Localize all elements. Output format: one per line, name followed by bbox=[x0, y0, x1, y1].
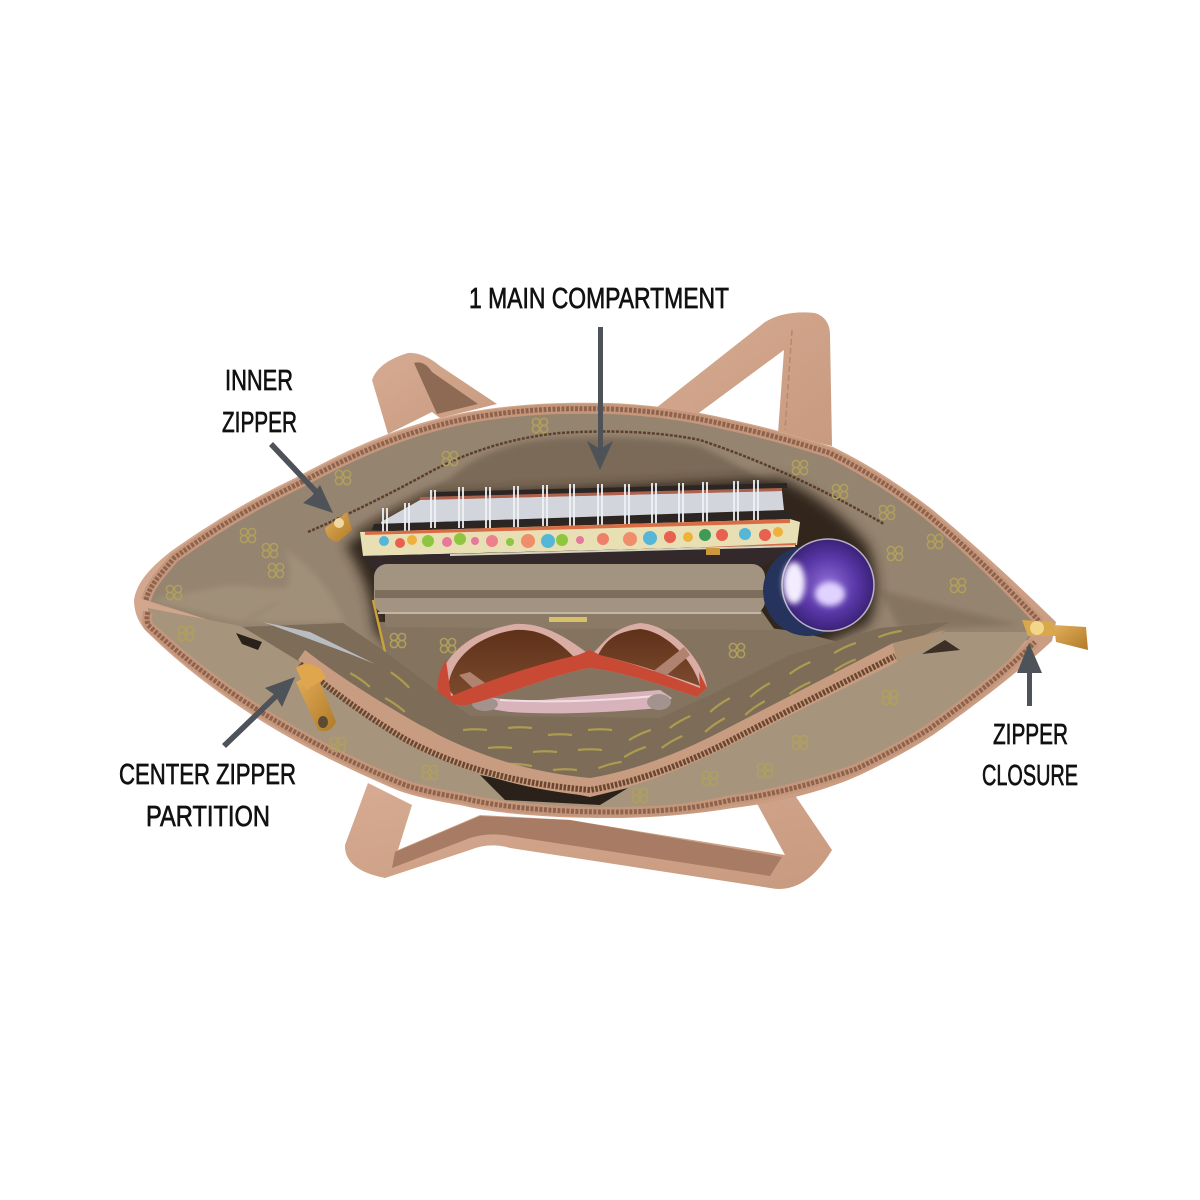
label: zipper closure bbox=[982, 719, 1078, 792]
lining: upper back wall bbox=[146, 409, 1040, 670]
label: zipper closure: ZIPPER bbox=[993, 719, 1068, 751]
label: 1 main compartment: 1 MAIN COMPARTMENT bbox=[469, 283, 729, 315]
main compartment: dark cavity bbox=[345, 437, 876, 660]
rim zipper tape bbox=[146, 409, 1040, 812]
lining gold logo marks bbox=[166, 418, 966, 803]
compartment floor bbox=[378, 622, 850, 745]
label: inner zipper: ZIPPER bbox=[222, 407, 297, 439]
temple arms bbox=[470, 690, 672, 713]
handle: back left bbox=[372, 353, 497, 434]
label: center zipper partition: CENTER ZIPPER bbox=[119, 759, 296, 791]
zipper pull: main closure bbox=[1022, 620, 1088, 650]
notebook: spiral bound bbox=[372, 480, 792, 533]
gold clasp bbox=[706, 548, 722, 570]
floor logo pattern bbox=[390, 633, 745, 658]
rim zipper track bbox=[146, 409, 1040, 812]
notebook: floral cover bbox=[360, 519, 800, 570]
wallet: taupe zip wallet bbox=[373, 564, 775, 652]
zipper pull: center partition bbox=[296, 664, 336, 731]
arrow: main compartment bbox=[587, 327, 613, 470]
arrow: center zipper partition bbox=[222, 677, 295, 748]
label: center zipper partition: PARTITION bbox=[146, 801, 270, 833]
center partition: patterned pocket bbox=[243, 622, 950, 796]
handles: front pair bbox=[345, 783, 832, 889]
gray tag bbox=[263, 622, 375, 664]
frame bbox=[437, 623, 707, 706]
zipper pull: inner zipper bbox=[325, 512, 352, 542]
lining shadow folds bbox=[240, 550, 345, 622]
label: inner zipper: INNER bbox=[225, 365, 293, 397]
handle: back right bbox=[656, 312, 832, 446]
arrow: inner zipper bbox=[269, 442, 333, 513]
inner zipper seam bbox=[308, 432, 884, 532]
gold strap bbox=[373, 600, 385, 652]
woven motif bbox=[350, 630, 902, 770]
lower lining: front wall bbox=[148, 608, 1032, 812]
label: center zipper partition bbox=[119, 759, 296, 833]
label: inner zipper bbox=[222, 365, 297, 439]
partition zipper bbox=[298, 643, 897, 796]
bag body: leather rim bbox=[134, 403, 1056, 818]
dark slits between partition and wall bbox=[236, 633, 960, 805]
arrow: zipper closure bbox=[1017, 643, 1042, 706]
label: zipper closure: CLOSURE bbox=[982, 760, 1078, 792]
bottle: purple cap bbox=[763, 539, 874, 636]
sunglasses bbox=[437, 623, 707, 713]
dark book edge bbox=[361, 545, 798, 570]
wallet logo bbox=[549, 617, 587, 622]
